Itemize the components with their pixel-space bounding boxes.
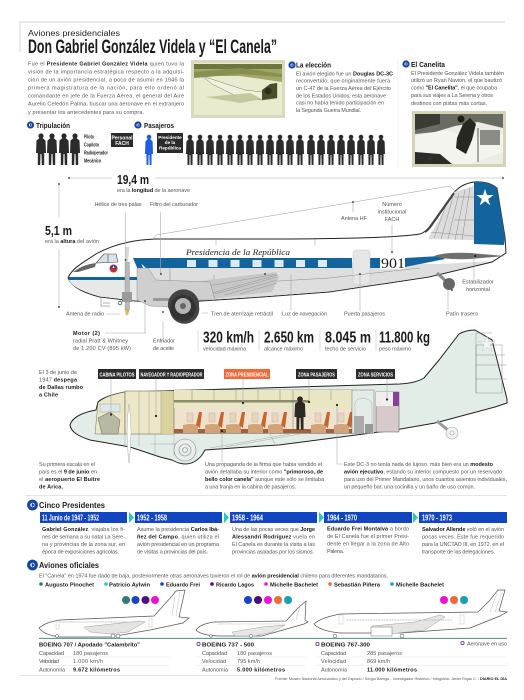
stat: peso — [379, 330, 430, 352]
main wheel — [174, 439, 196, 461]
text: DC-3 modesto — [344, 462, 507, 490]
text: primera escala: el aeropuerto El Buitre — [39, 477, 100, 483]
leader lines and markers — [105, 201, 476, 342]
panel: El Canelita: El Presidente González Videla también — [411, 71, 504, 77]
text: propaganda: a una franja en la cabina de pasajeros. — [205, 484, 296, 490]
aircraft callouts: Motor (2) — [73, 331, 100, 337]
panel: El Canelita: destinos con pistas más cortas. — [411, 101, 487, 107]
text: Allende: transporte de las delegaciones. — [422, 550, 495, 556]
aircraft callouts: Estabilizador — [462, 280, 494, 286]
aircraft callouts: horizontal — [466, 287, 490, 293]
page frame — [20, 22, 505, 52]
zone label: Zona pasajeros — [296, 369, 337, 379]
panel: La elección: casi no había tenido participación en — [296, 101, 384, 107]
panel: La elección: un C-47 de la Fuerza Aérea del Ejército — [296, 86, 391, 92]
stat: peso: peso máximo — [379, 346, 411, 352]
radio antenna and ladder — [101, 298, 122, 306]
zone label: Navegador y radioperador: NAVEGADOR Y RADIOPERADOR — [140, 372, 203, 378]
text: 3 de junio: 1947 despega — [39, 378, 78, 384]
president silhouette — [145, 135, 153, 165]
divider — [25, 494, 507, 496]
color dots — [440, 596, 468, 604]
zone label: Cabina pilotos — [98, 369, 136, 379]
stat: techo: 8.045 m — [325, 330, 371, 346]
text: Frei Montalva — [327, 526, 409, 555]
panel: El Canelita — [402, 60, 506, 167]
panel: Pasajeros — [134, 121, 385, 165]
spec table: Boeing 737: 180 pasajeros — [237, 651, 272, 657]
fuselage lower structure — [125, 434, 300, 457]
panel: Tripulación: Tripulación — [36, 123, 70, 130]
aircraft callouts: Antena HF — [341, 216, 368, 222]
text: Alessandri: provincias asoladas por los sismos. — [232, 550, 314, 556]
navigator section — [125, 391, 174, 434]
dimension: height — [45, 183, 99, 308]
stat: alcance: 2.650 km — [264, 330, 314, 346]
aircraft callouts: Número — [382, 202, 402, 208]
text: propaganda: Una propaganda de la firma que había vendido el — [205, 462, 322, 468]
nose lower — [69, 280, 147, 300]
spec table: Boeing 767: Velocidad — [321, 659, 346, 665]
spec table: Boeing 767: Capacidad — [321, 651, 346, 657]
spec table: Boeing 767: BOEING 767-300 — [321, 642, 370, 648]
text: González Videla — [42, 527, 125, 556]
text: DC-3 modesto: Este DC-3 no tenía nada de lujoso, más bien era un modesto — [344, 462, 494, 468]
timeline dates: 11 Junio de 1947 - 1952 — [42, 514, 99, 522]
text: Alessandri: Una de las pocas veces que Jorge — [232, 527, 315, 533]
aircraft callouts: Puerta pasajeros — [344, 312, 385, 318]
spec table: Boeing 707: Velocidad — [39, 659, 59, 665]
crew roles: Piloto — [84, 134, 94, 140]
text: González Videla: nes de semana a su natal La Sere- — [42, 534, 125, 540]
photo: Ryan Navion — [412, 111, 506, 167]
spec table: Boeing 707 — [39, 642, 170, 674]
zone label: Zona pasajeros: ZONA PASAJEROS — [298, 372, 336, 378]
cutaway hull — [70, 330, 507, 464]
bottom line — [20, 674, 270, 676]
label: Personal FACH: Personal — [111, 136, 133, 142]
aircraft callouts: Hélice de tres palas — [94, 202, 142, 208]
intro text: visión de la importancia estratégica respecto a la adquisi- — [28, 70, 184, 76]
aircraft callouts: Tren de aterrizaje retráctil — [211, 312, 273, 318]
tail star — [476, 189, 494, 205]
cabin windows — [187, 260, 327, 267]
divider — [397, 60, 399, 167]
aircraft cutaway — [70, 330, 507, 464]
text: Allende — [422, 527, 504, 556]
text: Alessandri: Alessandri Rodríguez vuela en — [232, 534, 315, 540]
panel: La elección: de los Estados Unidos, esta aeronave — [296, 93, 386, 99]
panel: El Canelita: utilizó un Ryan Navion, el que bautizó — [411, 78, 502, 84]
text: primera escala: país es el 9 de junio en — [39, 470, 97, 476]
legend: presidents: Michelle Bachelet — [270, 582, 318, 588]
legend: presidents: Sebastián Piñera — [334, 582, 381, 588]
cockpit section — [95, 392, 125, 434]
HF antenna wire — [154, 186, 456, 238]
heading: Aviones oficiales: Aviones oficiales — [39, 561, 100, 570]
panel: Pasajeros: Pasajeros — [144, 123, 174, 130]
plane: Boeing 767 — [314, 590, 507, 638]
aircraft callouts — [66, 202, 494, 352]
aircraft callouts: Antena de radio — [66, 312, 104, 318]
standing figure — [294, 396, 306, 430]
text: Alessandri — [232, 527, 315, 556]
heading: Cinco Presidentes: Cinco Presidentes — [39, 501, 106, 510]
dimension: length: 19,4 m — [117, 172, 149, 187]
spec table: Boeing 737: 5.000 kilómetros — [237, 668, 285, 674]
tail blue — [474, 182, 505, 245]
legend: presidents: Ricardo Lagos — [216, 582, 254, 588]
intro text: Fue el Presidente Gabriel González Videla quien tuvo la — [28, 62, 185, 68]
text: 3 de junio: de Dallas rumbo — [39, 385, 84, 391]
aircraft callouts: de aceite — [153, 346, 174, 352]
text: Frei Montalva: de El Canela fue el primer Presi- — [327, 534, 409, 540]
aircraft callouts: Patín trasero — [446, 312, 478, 318]
label: Presidente de la República — [157, 133, 183, 153]
panel: La elección — [288, 61, 393, 114]
title: Don Gabriel González Videla y “El Canela” — [28, 36, 277, 58]
intro text: primera magistratura de la nación, para ello ordenó al — [28, 86, 184, 92]
text: Allende: para la UNCTAD III, en 1972, en el — [422, 542, 504, 548]
cockpit windows — [96, 254, 118, 263]
tail wheel — [437, 421, 458, 439]
text: Alessandri: El Canela es durante la visita a las — [232, 542, 315, 548]
statistics row — [198, 330, 430, 352]
text: 3 de junio: El 3 de junio de — [39, 370, 77, 376]
spec table: Boeing 707: 180 pasajeros — [73, 651, 108, 657]
label: Presidente de la República: Presidente — [158, 135, 182, 140]
text: González Videla: na y provincias de la zona sur, en — [42, 542, 125, 548]
spec table: Boeing 707: BOEING 707 / Apodado "Calambrito" — [39, 642, 140, 648]
text: 3 de junio: a Chile — [39, 392, 58, 398]
text: primera escala: de Arica. — [39, 484, 63, 490]
crew roles: Mecánico — [84, 158, 101, 164]
fin leading edge — [425, 193, 454, 232]
panel: La elección: La elección — [296, 62, 331, 70]
timeline arrows — [129, 512, 418, 523]
text: propaganda — [205, 462, 325, 490]
spec table: Boeing 707: 1.000 km/h — [73, 659, 103, 665]
crew roles — [84, 134, 108, 164]
spec table: Boeing 737: Autonomía — [202, 668, 229, 674]
legend: presidents: Patricio Aylwin — [109, 582, 150, 588]
spec table: Boeing 767: 869 km/h — [367, 659, 390, 665]
passenger door — [353, 250, 370, 285]
legend: presidents — [39, 582, 444, 588]
services — [376, 392, 399, 432]
timeline — [40, 512, 507, 556]
text: Frei Montalva: Palena. — [327, 549, 344, 555]
zone label: Navegador y radioperador — [139, 369, 204, 379]
timeline dates: 1964 - 1970 — [327, 514, 357, 522]
panel: La elección: El avión elegido fue un Douglas DC-3C — [296, 72, 393, 78]
galley — [352, 390, 374, 434]
dimension: length — [68, 172, 504, 194]
aircraft callouts: Filtro del carburador — [150, 202, 198, 208]
text: DC-3 modesto: avión ejecutivo, estando su interior compuesto por un reservado — [344, 470, 502, 476]
spec table: Boeing 767: Autonomía — [321, 668, 348, 674]
legend: presidents: Augusto Pinochet — [45, 582, 94, 588]
color dots — [244, 596, 292, 604]
panel: La elección: reconvertido, que originalmente fuera — [296, 79, 391, 85]
text: Allende: pocas veces. Éste fue requerido — [422, 534, 504, 540]
spec table: Boeing 737: BOEING 737 - 500 — [202, 642, 254, 648]
zone label: Zona servicios — [356, 369, 395, 379]
stat: alcance: alcance máximo — [264, 346, 303, 352]
text: DC-3 modesto: un pequeño bar, una cocinilla y un baño de uso común. — [344, 484, 475, 490]
aircraft callouts: Luz de navegación — [282, 312, 327, 318]
zone label: Zona presidencial: ZONA PRESIDENCIAL — [226, 372, 268, 378]
tail panels — [476, 333, 507, 393]
panel: El Canelita: como "El Canelita", el que ocupaba — [411, 86, 498, 92]
spec table: Boeing 707: Capacidad — [39, 651, 64, 657]
text: Frei Montalva: Eduardo Frei Montalva a bordo — [327, 526, 409, 532]
leader lines and markers — [110, 379, 388, 464]
zone label: Zona servicios: ZONA SERVICIOS — [358, 372, 394, 378]
aircraft callouts: FACH — [385, 217, 399, 223]
shield — [110, 264, 118, 272]
engine nacelle — [137, 268, 215, 307]
propeller — [122, 247, 132, 315]
spec table: Boeing 737: Capacidad — [202, 651, 227, 657]
passenger silhouettes — [186, 135, 385, 165]
crew roles: Copiloto — [84, 142, 99, 148]
panel: La elección: la Segunda Guerra Mundial. — [296, 108, 361, 114]
tail star — [479, 336, 495, 351]
spec table: Boeing 767: 285 pasajeros — [367, 651, 402, 657]
aircraft callouts: radial Pratt & Whitney — [73, 338, 128, 344]
panel: El Canelita: para sus viajes a La Serena y otros — [411, 93, 493, 99]
text: González Videla: Gabriel González, viajaba los fi- — [42, 527, 125, 533]
lower fuselage — [69, 261, 492, 302]
spec table: Boeing 737 — [196, 642, 306, 674]
text: Ibáñez: de visitas a provincias del país. — [137, 550, 208, 556]
label: Personal FACH — [111, 133, 133, 147]
plane: Boeing 737 — [196, 596, 308, 638]
timeline dates: 1952 - 1958 — [137, 514, 167, 522]
zone label: Zona presidencial — [224, 369, 270, 379]
stat: techo: techo de servicio — [325, 346, 366, 352]
text: 3 de junio — [39, 370, 84, 398]
timeline dates — [42, 514, 452, 522]
stat: velocidad: 320 km/h — [203, 330, 254, 346]
heading: Cinco Presidentes — [27, 500, 106, 510]
presidential and passenger cabin — [174, 390, 352, 434]
label: Personal FACH: FACH — [115, 141, 129, 147]
text: Allende: Salvador Allende voló en el avión — [422, 527, 504, 533]
title — [28, 28, 277, 58]
intro text: comandante en jefe de la Fuerza Aérea, el general del Aire — [28, 94, 184, 100]
intro line: aviones oficiales: El "Canela" en 1974 fue dado de baja, posteriormente otras aeronaves tuvieron el rol de avión presidencial chileno para diferentes mandatarios. — [39, 574, 388, 580]
aircraft side view: DC-3 El Canela — [68, 182, 506, 342]
panel: Tripulación — [27, 121, 133, 165]
intro text: Aurelio Celedón Palma, buscar una aeronave en el extranjero — [28, 102, 184, 108]
label: Presidente de la República: República — [159, 145, 181, 150]
legend: presidents: Michelle Bachelet — [396, 582, 444, 588]
stat: velocidad — [203, 330, 254, 352]
propeller — [127, 404, 131, 463]
horizontal stabilizer — [434, 253, 505, 259]
source credit: Fuente: Museo Nacional Aeronáutico y del Espacio / Sergio Barriga - Investigador Histórico / Infografía: Javier Rojas C. / DIARIO EL DÍA — [275, 676, 508, 681]
crew roles: Radioperador — [84, 150, 108, 156]
ground line — [39, 637, 507, 639]
stat: peso: 11.800 kg — [379, 330, 430, 346]
seats — [183, 412, 353, 433]
crew silhouettes — [36, 133, 80, 165]
dimension: length: era la longitud de la aeronave — [117, 188, 190, 194]
bulkhead — [292, 390, 294, 433]
spec table: Boeing 737: Velocidad — [202, 659, 226, 665]
intro text — [28, 62, 185, 116]
aircraft callouts: Enfriador — [153, 338, 175, 344]
text: DC-3 modesto: para uso del Primer Mandatario, unos cuantos asientos individuales, — [344, 477, 507, 483]
timeline tabs — [40, 512, 507, 523]
text: Ibáñez: avión presidencial en un programa — [137, 542, 220, 548]
heading: Aviones oficiales — [27, 560, 100, 570]
legend: aircraft in use: Aeronave en uso — [467, 642, 507, 648]
legend: presidents: Eduardo Frei — [166, 582, 200, 588]
wing — [180, 272, 279, 300]
stat: velocidad: velocidad máxima — [203, 346, 247, 352]
intro text: y presentar los antecedentes para su compra. — [28, 110, 144, 116]
timeline dates: 1970 - 1973 — [422, 514, 452, 522]
main landing gear — [168, 289, 199, 324]
spec table: Boeing 707: Autonomía — [39, 668, 66, 674]
text: González Videla: época de exposiciones agrícolas. — [42, 550, 119, 556]
text: primera escala: Su primera escala en el — [39, 462, 95, 468]
stat: alcance — [264, 330, 314, 352]
timeline dates: 1958 - 1964 — [232, 514, 263, 522]
fuselage — [68, 182, 506, 303]
text: Ibáñez: Asume la presidencia Carlos Ibá- — [137, 527, 219, 533]
text: Ibáñez — [137, 527, 220, 556]
spec table: Boeing 767: 11.000 kilómetros — [367, 668, 417, 674]
label: Presidente de la República: de la — [165, 140, 176, 145]
photo: Douglas DC-3 on the ground — [191, 60, 285, 118]
intro text: ción de un avión presidencial, a poco de asumir en 1946 la — [28, 78, 185, 84]
text: propaganda: bello color canela" aunque este sólo se limitaba — [205, 477, 325, 483]
dimension: height: era la altura del avión — [45, 239, 99, 245]
text: primera escala — [39, 462, 100, 490]
color dots — [122, 596, 159, 604]
plane: Boeing 707 — [39, 590, 189, 638]
blue stripe — [135, 256, 445, 268]
spec table: Boeing 707: 9.672 kilómetros — [73, 668, 120, 674]
aircraft callouts: institucional — [378, 210, 406, 216]
tail wheel — [437, 273, 455, 290]
fleet number: 901 — [381, 256, 405, 272]
dimension: height: 5,1 m — [45, 223, 72, 238]
text: propaganda: avión detallaba su interior como "primoroso, de — [205, 470, 323, 476]
title: Aviones presidenciales — [28, 28, 120, 38]
stat: techo — [325, 330, 371, 352]
spec table: Boeing 737: 795 km/h — [237, 659, 260, 665]
panel: El Canelita: El Canelita — [411, 62, 445, 69]
zone label: Cabina pilotos: CABINA PILOTOS — [100, 372, 135, 378]
text: Frei Montalva: dente en llegar a la zona de Alto — [327, 542, 409, 548]
script lettering: Presidencia de la República — [185, 247, 291, 257]
text: Ibáñez: ñez del Campo, quien utiliza el — [137, 534, 219, 540]
spec table: Boeing 767 — [315, 642, 507, 674]
aircraft callouts: de 1.200 CV (895 kW) — [73, 346, 131, 352]
fin structure — [428, 186, 474, 240]
